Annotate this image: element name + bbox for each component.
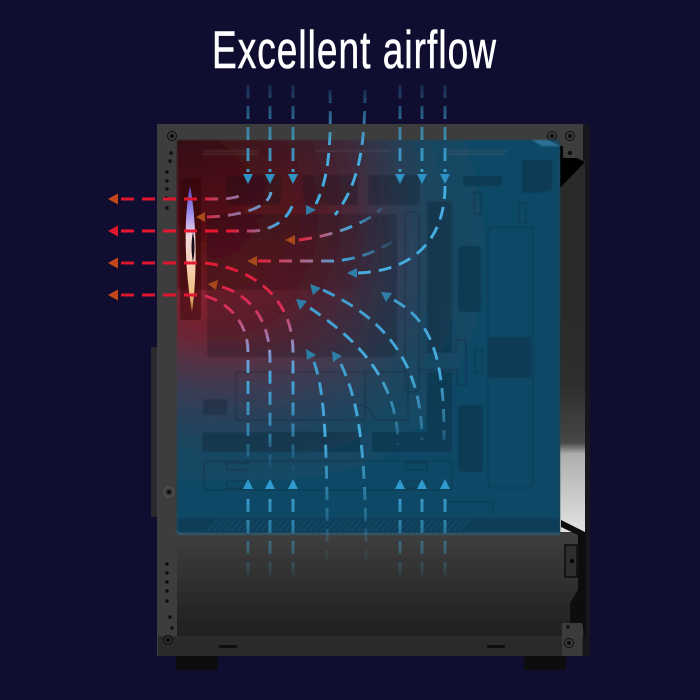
exhaust fan [180,178,201,320]
frame holes [164,151,174,630]
screws [164,132,574,648]
corner bracket [563,145,577,158]
lower dark band [178,518,560,533]
black corner wedge [560,146,585,188]
interior hot arrowheads [196,212,295,290]
top arrowheads [243,174,450,184]
corner bracket bottom [562,623,582,656]
interior base [177,140,560,533]
black wedge under glass [561,520,585,541]
feet [176,655,566,670]
airflow arrows [121,85,445,575]
exhaust arrowheads [108,194,118,300]
lower blue wash [177,340,560,533]
left side bump [151,347,158,517]
fan glow [186,186,196,312]
bottom plate [177,533,581,637]
curve into upper exhaust [207,192,271,217]
exhaust row 4 [121,294,205,296]
top curve to first cool arrowhead [316,90,330,204]
curve to upper hot arrowhead [299,208,382,240]
top shade [177,140,477,290]
blue curve one [323,290,422,440]
motherboard tray outlines [204,192,533,513]
title: Excellent airflow [212,21,497,80]
right glass panel [560,160,585,532]
interior bottom lip [177,531,560,534]
blue curve two [310,308,398,445]
PC case [151,124,590,670]
right blue wash [350,140,560,533]
motherboard tray details [202,160,552,472]
slots in bottom bar [219,645,505,648]
top intake dashes [248,85,445,172]
top vent lines [203,151,507,154]
blue curve three [394,300,444,440]
fan housing [180,178,201,320]
case body frame [157,124,583,656]
interior cool arrowheads [296,205,392,362]
exhaust row 2 [121,200,294,231]
right black edge [583,124,590,656]
curve to mid arrowhead [258,242,392,261]
red curve to left down lane [205,296,248,470]
bottom curve two [341,364,366,560]
bottom arrowheads [243,479,450,489]
drive bay latch [565,545,577,577]
red curve to middle down lane [222,287,270,470]
bottom bar [158,636,583,656]
bottom intake dashes [248,492,445,575]
fan slit [192,232,194,262]
red curve to the far down lane [205,263,293,470]
top right lip [532,140,560,146]
right top curve to arrowhead [358,186,445,273]
vent slats [207,520,469,531]
exhaust row 3 [121,262,205,264]
bottom curve one [314,362,327,560]
black notch lower right [570,533,586,640]
case interior with heat gradient [177,140,560,534]
arrowheads [108,174,450,489]
exhaust row 1 [121,195,242,199]
long top curve fading out [335,90,365,215]
